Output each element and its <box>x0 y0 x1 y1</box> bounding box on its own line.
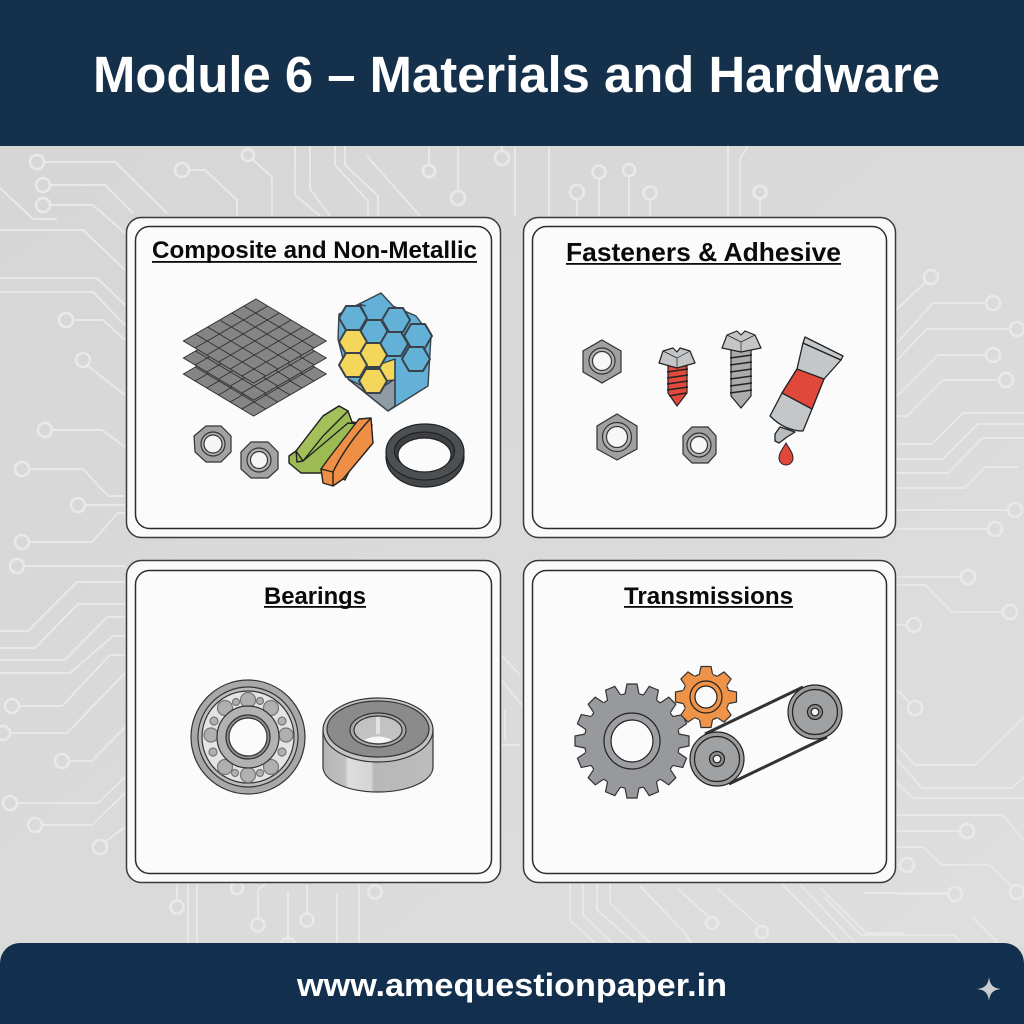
heading: fasteners: Fasteners & Adhesive <box>566 237 841 267</box>
icon: stacked composite sheets <box>183 299 326 416</box>
background circuit pattern <box>0 146 1024 955</box>
panel: fasteners and adhesive <box>524 218 896 538</box>
icon: octagon nut left <box>194 426 231 462</box>
panel: transmissions <box>524 560 896 882</box>
icon: belt and pulleys <box>690 685 842 786</box>
icon: hex nut lower right <box>683 427 716 463</box>
icon: green and orange block <box>289 406 373 486</box>
icon: sparkle <box>977 977 1001 1001</box>
icon: honeycomb core <box>338 293 432 411</box>
icon: hex nut lower left <box>597 414 637 460</box>
icon: small orange gear <box>676 666 736 728</box>
icon: ball bearing front view <box>191 680 305 794</box>
icon: red screw <box>659 348 695 406</box>
icon: octagon nut right <box>241 442 278 478</box>
footer url: www.amequestionpaper.in <box>296 967 727 1003</box>
heading: bearings: Bearings <box>264 583 366 610</box>
icon: black ring <box>386 424 464 487</box>
icon: adhesive drop <box>779 443 793 465</box>
title: Module 6 – Materials and Hardware <box>93 46 940 103</box>
panel: composite and non-metallic <box>126 218 500 538</box>
footer band <box>0 943 1024 1024</box>
panel: bearings <box>126 560 500 882</box>
icon: large gear <box>575 684 689 798</box>
icon: sealed bearing side view <box>323 698 433 792</box>
icon: grey screw <box>722 331 761 408</box>
heading: composite: Composite and Non-Metallic <box>152 237 477 264</box>
icon: hex nut top <box>583 340 621 383</box>
header band <box>0 0 1024 146</box>
icon: adhesive tube <box>770 337 843 443</box>
heading: transmissions: Transmissions <box>624 583 793 610</box>
